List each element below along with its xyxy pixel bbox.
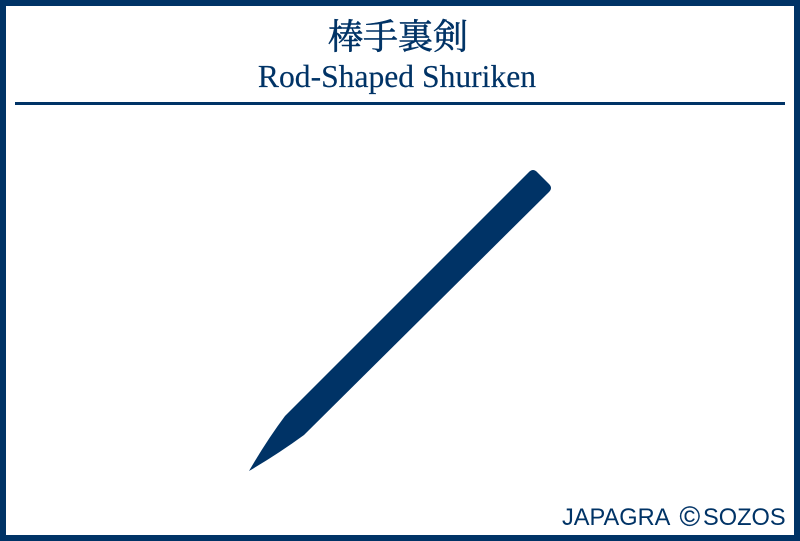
title: Japanese: 棒手裏剣 <box>328 18 468 57</box>
credit text: SOZOS <box>703 505 786 531</box>
credit text: JAPAGRA <box>562 505 670 531</box>
subtitle: English: Rod-Shaped Shuriken <box>258 59 536 94</box>
header divider line <box>15 102 785 104</box>
credit text: © <box>680 501 700 532</box>
credit text <box>562 501 786 532</box>
